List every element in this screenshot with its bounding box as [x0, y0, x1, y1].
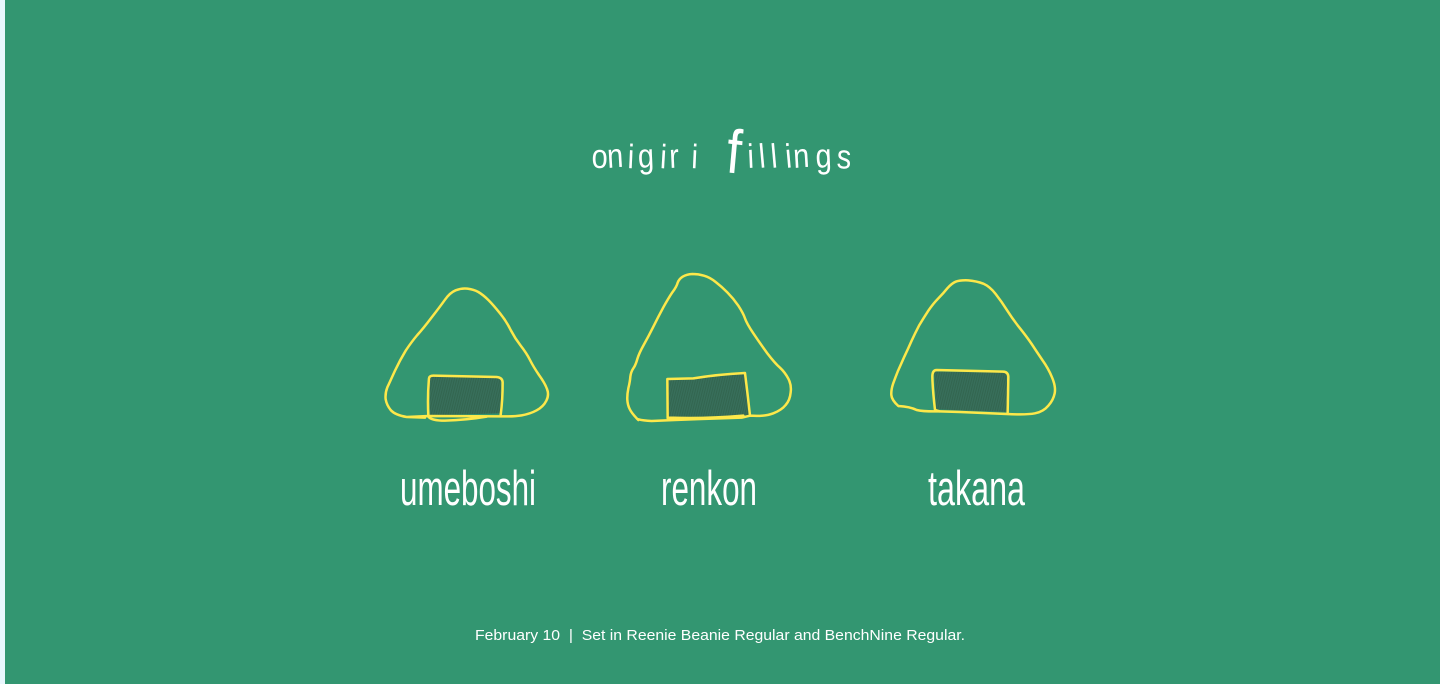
nori: renkon — [668, 373, 750, 418]
title — [592, 117, 852, 188]
label: renkon: renkon — [661, 462, 757, 516]
rice outline: renkon — [627, 274, 791, 421]
nori: takana — [934, 372, 1008, 412]
rice outline: umeboshi — [386, 289, 548, 418]
nori: umeboshi — [429, 377, 502, 415]
title: onigiri — [592, 136, 699, 176]
title: illings — [747, 136, 852, 176]
footer note: February 10 | Set in Reenie Beanie Regular and BenchNine Regular. — [475, 627, 965, 644]
label: takana: takana — [928, 462, 1025, 516]
onigiri: umeboshi — [386, 289, 548, 421]
nori outline: umeboshi — [428, 376, 503, 421]
onigiri: renkon — [627, 274, 791, 421]
nori outline: takana — [932, 370, 1008, 413]
rice outline: takana — [891, 280, 1055, 414]
nori outline: renkon — [667, 373, 750, 418]
onigiri: takana — [891, 280, 1055, 414]
title: f — [724, 117, 745, 188]
label: umeboshi: umeboshi — [400, 462, 536, 516]
